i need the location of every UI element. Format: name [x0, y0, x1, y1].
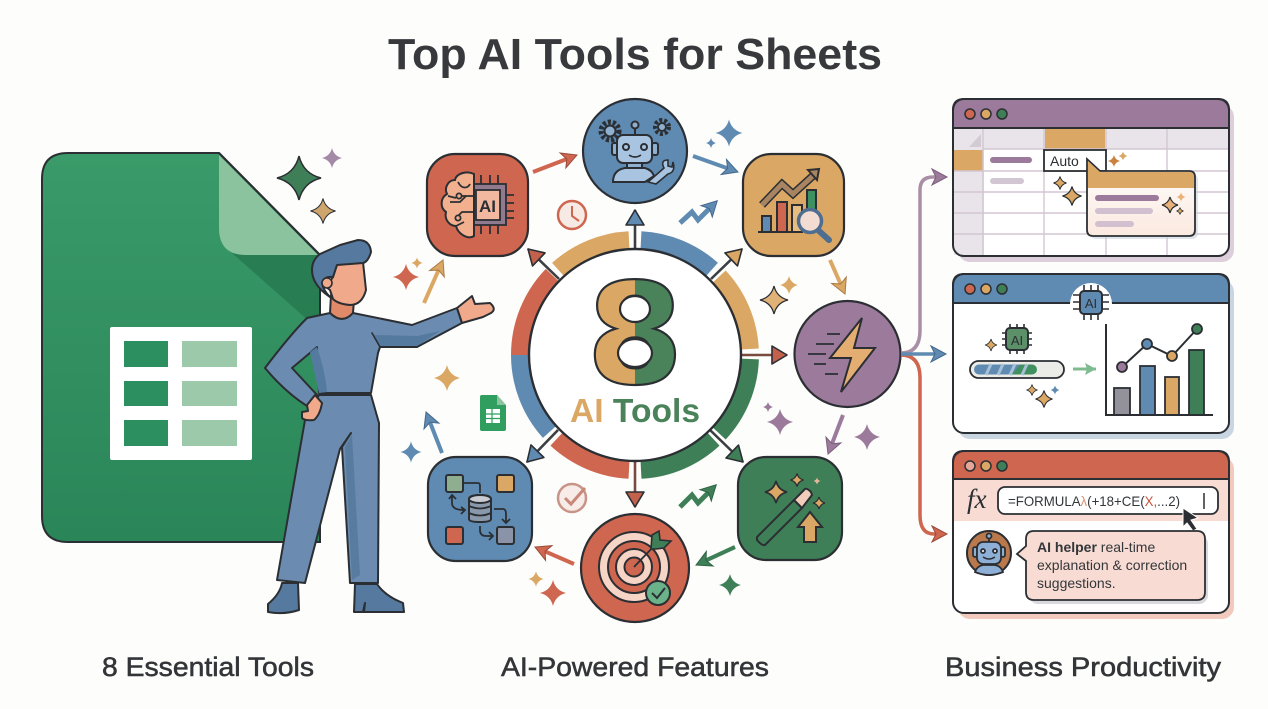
sparkles near document: [277, 148, 342, 224]
header AI chip: [1070, 283, 1112, 320]
icon: mini sheets logo: [480, 395, 506, 431]
suggestion popup: [1087, 159, 1198, 239]
cycle arrows between tools: [424, 156, 843, 564]
table glyph on the document: [110, 327, 252, 460]
footer label: AI-Powered Features: AI-Powered Features: [501, 652, 769, 682]
AI helper speech bubble: AI helper real-time: [1037, 539, 1155, 555]
footer label: 8 Essential Tools: 8 Essential Tools: [102, 652, 314, 682]
tool 2: robot with gears: [583, 99, 687, 203]
AI helper speech bubble: explanation & correction: [1037, 557, 1187, 573]
AI Tools label: AI Tools: [570, 392, 700, 429]
header AI chip: AI: [1085, 296, 1097, 311]
Auto cell: [1044, 150, 1106, 171]
window 3: formula helper: [953, 451, 1234, 619]
tool 1: brain and AI chip: [427, 154, 528, 256]
icon: mouse pointer: [1183, 508, 1198, 531]
right hand: [457, 296, 494, 323]
window controls: [965, 284, 1007, 294]
title: Top AI Tools for Sheets: [388, 30, 882, 79]
tool 3: growth chart and magnifier: [743, 154, 844, 256]
window controls: [965, 109, 1007, 119]
window controls: [965, 461, 1007, 471]
torso and arms: [265, 308, 462, 406]
hair: [312, 240, 371, 297]
presenter figure: [265, 240, 494, 613]
green AI chip: [1002, 324, 1032, 354]
zigzag trend arrows: [680, 205, 713, 507]
progress bar: [970, 361, 1064, 378]
ear: [322, 278, 332, 288]
window 3: formula helper: =FORMULAλ(+18+CE(X,...2): [1008, 493, 1180, 509]
window 1: autocomplete spreadsheet: [953, 99, 1234, 262]
face: [326, 262, 366, 305]
ring segments: [520, 240, 750, 470]
spreadsheet document icon: [42, 153, 320, 542]
window 2: AI processing and analytics: [953, 274, 1234, 439]
tool 7: data flow: [428, 457, 532, 561]
AI helper speech bubble: suggestions.: [1037, 575, 1116, 591]
centre badge: 8 AI Tools: [529, 249, 741, 461]
trousers: [277, 395, 379, 583]
bar and line chart: [1106, 324, 1213, 415]
decorative sparkles around the cycle: [393, 120, 880, 606]
left shoe: [268, 583, 299, 613]
green AI chip: AI: [1011, 333, 1023, 348]
AI helper speech bubble: [1017, 531, 1208, 604]
ring-to-tool arrows: [527, 210, 787, 507]
left hand on hip: [302, 395, 322, 420]
icon: clock: [558, 201, 586, 229]
fx label: fx: [967, 484, 987, 514]
formula field: [998, 487, 1218, 514]
window 1: autocomplete spreadsheet: Auto: [1050, 153, 1079, 169]
tool 6: target with check: [581, 514, 689, 622]
icon: check badge: [558, 484, 586, 512]
big numeral 8: 8: [586, 254, 684, 417]
neck: [330, 295, 354, 319]
icon: robot avatar: [967, 531, 1011, 575]
tool 5: magic wand: [738, 457, 842, 560]
tool 1: brain and AI chip: AI: [479, 197, 496, 216]
right shoe: [354, 584, 404, 612]
tool 4: lightning bolt: [794, 301, 900, 407]
numeral counters: [618, 296, 652, 367]
connectors from lightning to windows: [901, 177, 941, 534]
footer label: Business Productivity: Business Productivity: [945, 652, 1222, 682]
